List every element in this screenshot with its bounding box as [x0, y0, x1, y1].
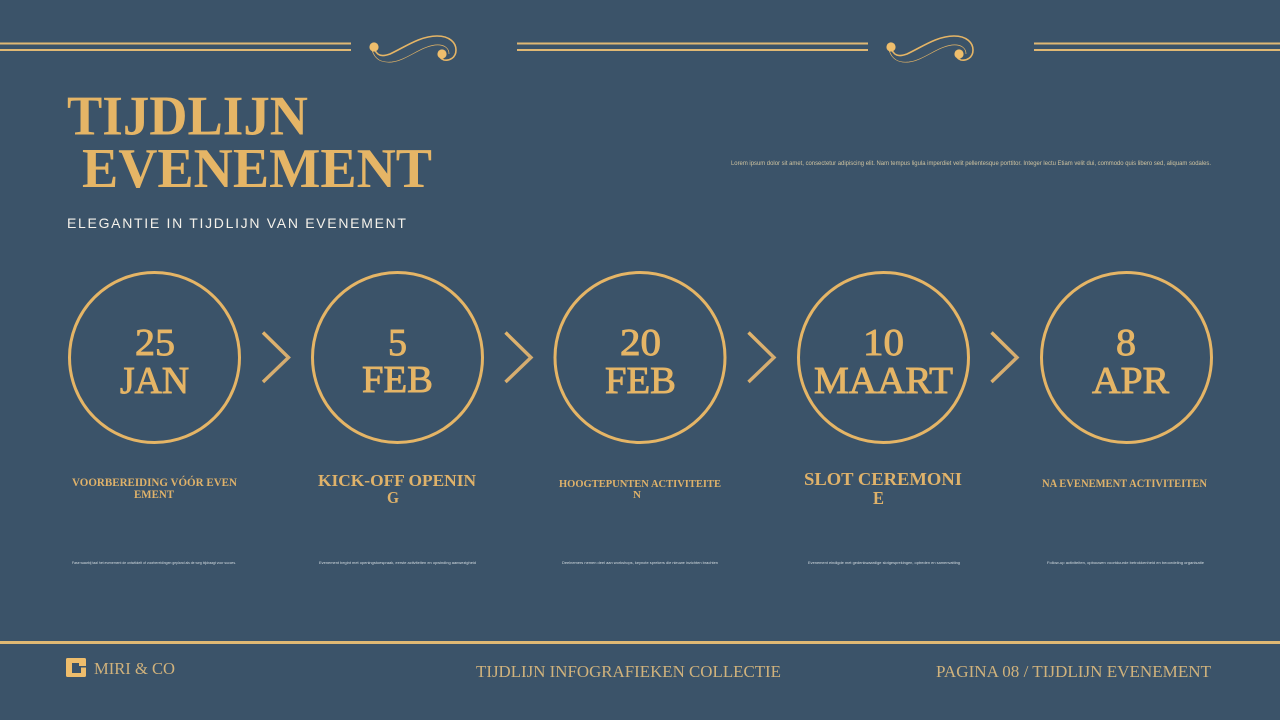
- date 2: FEB: [362, 359, 433, 401]
- description 4: Evenement eindigde met gedenkwaardige slotgesprekingen, optreden en samenvatting: [808, 561, 960, 565]
- footer logo: Miri & Co: [66, 658, 175, 678]
- date circle 2: [312, 272, 482, 442]
- date 2: [362, 322, 433, 401]
- description 3: Deelnemers nemen deel aan workshops, keynote sprekers die nieuwe inzichten brachten: [562, 561, 718, 565]
- date 4: [814, 322, 953, 402]
- step 4: 10 maart: [798, 272, 968, 565]
- label 2: KICK-OFF OPENIN: [318, 471, 477, 490]
- label 4: SLOT CEREMONI: [804, 469, 962, 489]
- icon: logo mark: [66, 658, 86, 677]
- step 5: 8 apr: [1042, 272, 1212, 565]
- date 1: JAN: [120, 360, 189, 402]
- arrow 1: [263, 332, 288, 382]
- label 3: N: [633, 489, 641, 501]
- brand name: MIRI & CO: [94, 659, 175, 678]
- footer rule: [0, 641, 1280, 644]
- date 5: APR: [1092, 360, 1170, 402]
- title: TIJDLIJN: [67, 86, 308, 148]
- description 2: Evenement begint met openingstoespraak, eerste activiteiten en opwinding aanwezigheid: [319, 560, 476, 565]
- title: EVENEMENT: [82, 138, 432, 200]
- label 4: E: [873, 488, 884, 508]
- title: [67, 86, 432, 200]
- step 1: 25 jan: [70, 272, 240, 565]
- arrow 2: [506, 332, 531, 382]
- label 1: EMENT: [134, 489, 174, 501]
- intro text: Lorem ipsum dolor sit amet, consectetur adipiscing elit. Nam tempus ligula imperdiet velit pellentesque porttitor. Integer lectu Etiam velit dui, commodo quis libero sed, aliquam sodales.: [731, 161, 1211, 167]
- label 2: G: [387, 488, 399, 507]
- label 4: [804, 469, 962, 508]
- date 2: 5: [388, 322, 407, 364]
- subtitle: ELEGANTIE IN TIJDLIJN VAN EVENEMENT: [67, 215, 406, 231]
- date 4: 10: [863, 322, 904, 364]
- date 1: [120, 322, 189, 402]
- label 1: [72, 475, 238, 501]
- step 2: 5 feb: [312, 272, 482, 565]
- label 5: NA EVENEMENT ACTIVITEITEN: [1042, 478, 1208, 490]
- arrow 3: [748, 332, 774, 382]
- date 3: FEB: [605, 360, 676, 402]
- label 3: [559, 478, 721, 501]
- date 3: [605, 322, 676, 402]
- label 3: HOOGTEPUNTEN ACTIVITEITE: [559, 478, 721, 490]
- label 1: VOORBEREIDING VÓÓR EVEN: [72, 475, 238, 489]
- description 1: Fase waarbij taal het evenement de ontwikkelt of voorbereidingen gepland als de weg bijdraagt voor succes.: [72, 561, 236, 565]
- date 4: MAART: [814, 360, 953, 402]
- top ornament band: [0, 36, 1280, 62]
- date 5: [1092, 322, 1170, 402]
- step 3: 20 feb: [555, 272, 725, 565]
- date circle 1: [70, 272, 240, 442]
- date 1: 25: [135, 322, 175, 364]
- date circle 5: [1042, 272, 1212, 442]
- label 2: [318, 471, 477, 507]
- date circle 4: [798, 272, 968, 442]
- date 5: 8: [1116, 322, 1136, 364]
- date 3: 20: [620, 322, 661, 364]
- arrow 4: [992, 332, 1017, 382]
- date circle 3: [555, 272, 725, 442]
- footer page label: PAGINA 08 / TIJDLIJN EVENEMENT: [936, 662, 1212, 681]
- description 5: Follow-up activiteiten, opbouwen voortduurde betrokkenheid en beoordeling organisatie: [1047, 561, 1204, 565]
- footer collection title: TIJDLIJN INFOGRAFIEKEN COLLECTIE: [476, 662, 781, 681]
